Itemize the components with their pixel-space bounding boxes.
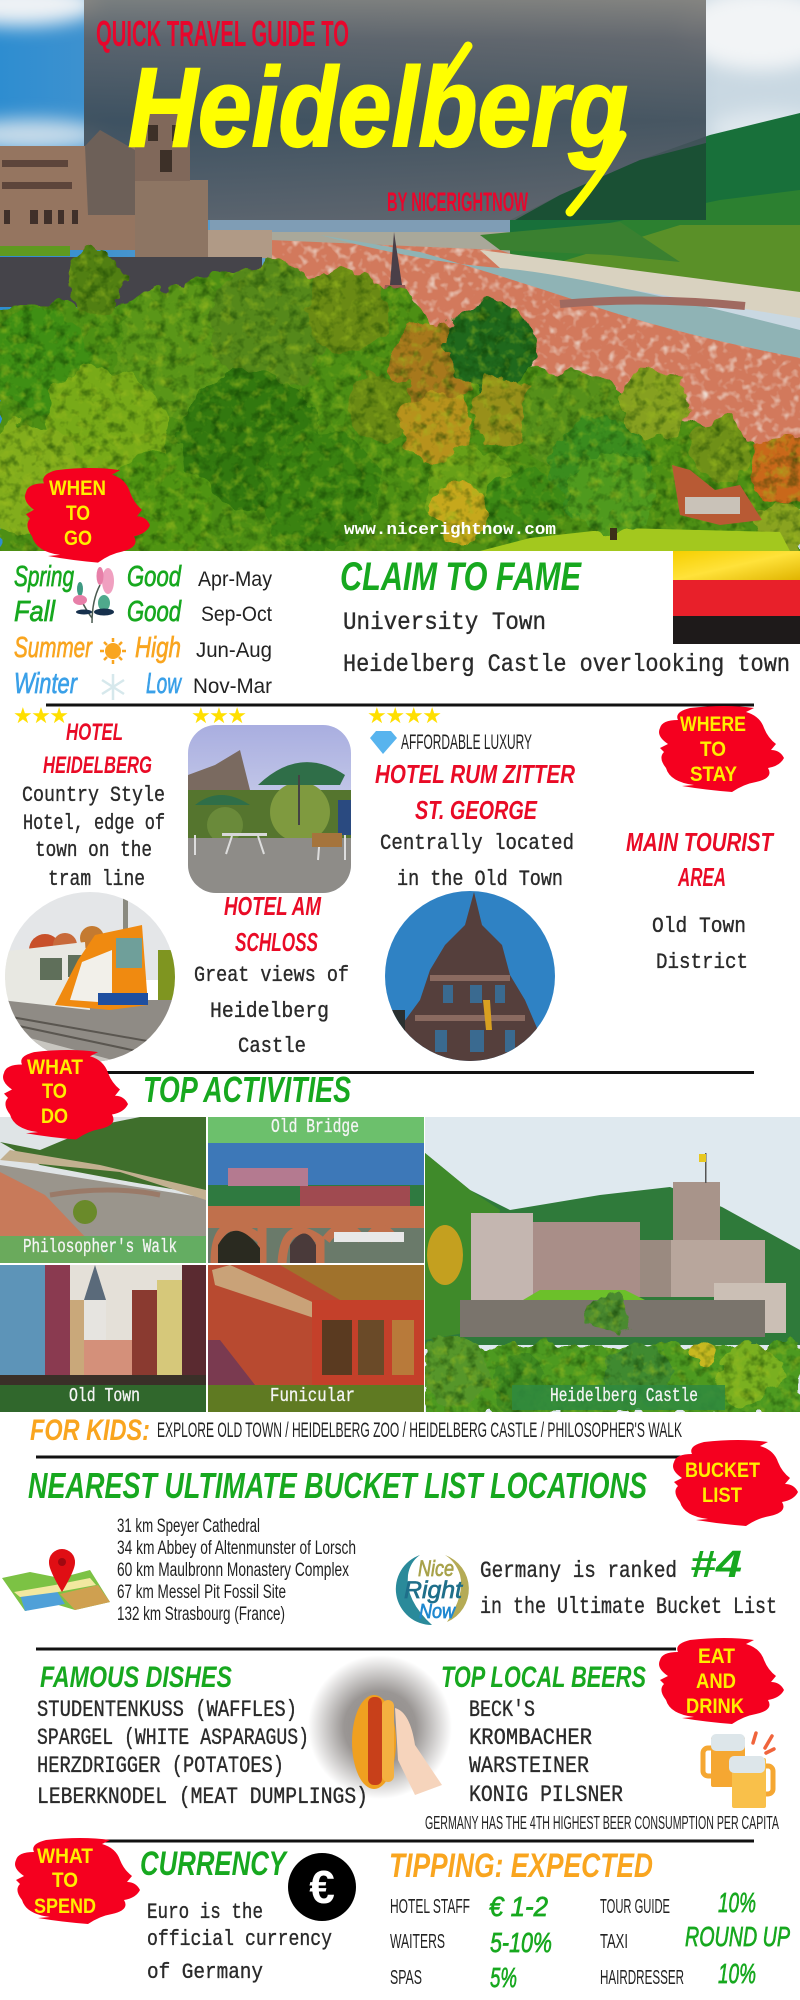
description: Country Style (22, 783, 165, 808)
text (147, 1900, 332, 1985)
germany ranking: Germany is ranked (480, 1558, 677, 1584)
website url: www.nicerightnow.com (344, 521, 556, 540)
German flag (673, 551, 800, 644)
badge: when to go (25, 468, 150, 563)
panel: hotel am schloss (188, 704, 351, 1059)
panel: claim to fame (340, 551, 800, 679)
text: of Germany (147, 1960, 263, 1985)
description: in the Old Town (397, 867, 563, 892)
photo: heidelberg castle (420, 1117, 800, 1417)
badge: when to go: TO (66, 502, 90, 525)
list: SPARGEL (WHITE ASPARAGUS) (37, 1725, 309, 1751)
icon: sun (100, 638, 126, 664)
description: Heidelberg (210, 999, 329, 1024)
photo grid (0, 1116, 800, 1417)
summer row: Summer (14, 632, 93, 664)
label: affordable luxury: AFFORDABLE LUXURY (401, 731, 532, 754)
badge: eat and drink: DRINK (686, 1695, 744, 1718)
winter row: Winter (14, 668, 78, 700)
list: KONIG PILSNER (469, 1782, 623, 1808)
photo: old town (0, 1265, 206, 1412)
list (469, 1697, 623, 1808)
icon: euro coin: € (309, 1861, 335, 1913)
photo: hotel terrace (188, 725, 351, 893)
photo: philosopher's walk: Philosopher's Walk (23, 1236, 177, 1258)
heading (626, 827, 775, 892)
panel: where to stay (626, 706, 784, 975)
text (652, 914, 748, 975)
logo: nice right now: Now (419, 1601, 456, 1623)
description: tram line (48, 867, 145, 892)
description: Castle (238, 1034, 306, 1059)
heading: FAMOUS DISHES (40, 1661, 232, 1694)
icon: flower (73, 567, 114, 623)
tipping values: € 1-2 (489, 1891, 548, 1922)
bucket list distances: 31 km Speyer Cathedral (117, 1516, 260, 1537)
list: LEBERKNODEL (MEAT DUMPLINGS) (37, 1784, 368, 1810)
tipping labels: WAITERS (390, 1931, 445, 1953)
icon: diamond (370, 731, 397, 754)
winter row: Low (146, 668, 182, 700)
fall row: Fall (14, 596, 56, 628)
tipping labels: HOTEL STAFF (390, 1896, 470, 1918)
panel: famous dishes (37, 1655, 452, 1810)
tipping values: 10% (718, 1958, 756, 1989)
tipping values: 10% (718, 1887, 756, 1918)
winter row: Nov-Mar (193, 675, 272, 698)
bucket list distances: 132 km Strasbourg (France) (117, 1604, 285, 1625)
spring row: Apr-May (198, 568, 272, 591)
list: STUDENTENKUSS (WAFFLES) (37, 1697, 297, 1723)
spring row: Spring (14, 561, 74, 593)
foliage (0, 250, 800, 577)
photo: old town: Old Town (69, 1385, 140, 1407)
tipping values: 5-10% (490, 1927, 552, 1958)
description: town on the (35, 838, 152, 863)
list: WARSTEINER (469, 1753, 589, 1779)
stars: ★★★ (13, 704, 69, 729)
title line: quick travel guide: QUICK TRAVEL GUIDE TO (96, 13, 349, 54)
winter row (14, 668, 272, 700)
logo: nice right now: Right (404, 1577, 463, 1604)
byline: BY NICERIGHTNOW (387, 187, 528, 217)
heading: CLAIM TO FAME (340, 555, 582, 599)
for kids line (30, 1414, 682, 1447)
bucket list distances: 67 km Messel Pit Fossil Site (117, 1582, 286, 1603)
summer row: High (135, 632, 181, 664)
photo: philosopher's walk (0, 1117, 206, 1263)
logo: nice right now (396, 1555, 469, 1625)
name: HOTEL (66, 719, 123, 746)
stars: ★★★ (191, 704, 247, 729)
tipping values: 5% (490, 1962, 517, 1993)
spring row: Good (127, 561, 182, 593)
badge: when to go: GO (64, 527, 92, 550)
photo: funicular (208, 1265, 424, 1412)
badge: when to go: WHEN (49, 477, 106, 500)
badge: bucket list: BUCKET (685, 1459, 760, 1482)
badge: eat and drink (659, 1638, 784, 1724)
bucket list distances (117, 1516, 356, 1625)
badge: bucket list (673, 1440, 798, 1526)
tipping labels: SPAS (390, 1967, 422, 1989)
name: HOTEL RUM ZITTER (375, 759, 575, 789)
panel: currency (140, 1845, 356, 1985)
badge: what to spend: SPEND (34, 1895, 96, 1918)
badge: STAY (690, 763, 737, 786)
badge: what to spend: WHAT (37, 1845, 93, 1868)
icon: euro coin (288, 1853, 356, 1921)
title: Heidelberg (128, 45, 628, 212)
badge: eat and drink: EAT (698, 1645, 735, 1668)
castle ruin (0, 109, 272, 307)
badge (659, 706, 784, 792)
badge: bucket list: LIST (702, 1484, 742, 1507)
bucket list distances: 34 km Abbey of Altenmunster of Lorsch (117, 1538, 356, 1559)
bucket list distances: 60 km Maulbronn Monastery Complex (117, 1560, 349, 1581)
text: University Town (343, 608, 546, 637)
panel: seasons (14, 561, 272, 700)
description: Hotel, edge of (23, 811, 165, 836)
tipping labels (390, 1896, 684, 1989)
panel: hotel rum zitter (367, 704, 575, 1065)
name (375, 759, 575, 825)
tipping labels: TAXI (600, 1931, 628, 1953)
photo: hot dog (308, 1655, 452, 1799)
summer row (14, 632, 272, 664)
heading: TIPPING: EXPECTED (389, 1847, 653, 1885)
text: District (656, 950, 748, 975)
title: Heidelberg: Heidelberg (128, 45, 628, 170)
list: KROMBACHER (469, 1725, 592, 1751)
heading: CURRENCY (140, 1845, 289, 1883)
badge: WHERE (680, 713, 746, 736)
icon: map with pin (2, 1549, 110, 1611)
photo: funicular: Funicular (270, 1385, 355, 1407)
germany ranking (480, 1544, 777, 1620)
icon: beer mugs (703, 1733, 774, 1808)
fall row: Sep-Oct (201, 603, 272, 626)
photo: old bridge: Old Bridge (271, 1116, 359, 1138)
badge: eat and drink: AND (696, 1670, 736, 1693)
hero photo: Heidelberg panorama (0, 0, 800, 577)
panel: hotel heidelberg (0, 704, 180, 1070)
stars: ★★★★ (367, 704, 442, 729)
panel: top local beers (425, 1661, 779, 1833)
description: Centrally located (380, 831, 574, 856)
list: BECK'S (469, 1697, 535, 1723)
heading: top activities: TOP ACTIVITIES (143, 1069, 351, 1110)
badge: what to do: WHAT (27, 1056, 83, 1079)
badge: what to spend: TO (52, 1869, 78, 1892)
photo: building (380, 890, 560, 1065)
name: ST. GEORGE (415, 795, 538, 825)
text: Euro is the (147, 1900, 263, 1925)
fall row (14, 596, 272, 628)
spring row (14, 561, 272, 593)
tipping values (489, 1887, 790, 1993)
badge: what to do (3, 1050, 128, 1139)
tipping labels: TOUR GUIDE (600, 1896, 670, 1918)
fall row: Good (127, 596, 182, 628)
photo: heidelberg castle: Heidelberg Castle (550, 1385, 698, 1407)
panel: tipping (389, 1847, 790, 1993)
badge: what to do: DO (41, 1105, 68, 1128)
heading: AREA (677, 862, 726, 892)
description (380, 831, 574, 892)
logo: nice right now: Nice (418, 1556, 454, 1581)
badge: TO (700, 738, 726, 761)
summer row: Jun-Aug (196, 639, 272, 662)
tipping labels: HAIRDRESSER (600, 1967, 684, 1989)
number: #4: #4 (690, 1544, 742, 1586)
description: Great views of (194, 963, 349, 988)
badge: what to do: TO (42, 1080, 67, 1103)
name: HOTEL AM (224, 891, 322, 921)
icon: snowflake (102, 674, 124, 700)
text: official currency (147, 1927, 332, 1952)
description (22, 783, 165, 892)
list: HERZDRIGGER (POTATOES) (37, 1753, 284, 1779)
photo: old bridge (208, 1116, 424, 1263)
description (194, 963, 349, 1059)
heading: TOP LOCAL BEERS (441, 1661, 646, 1694)
panel: hotel am schloss: SCHLOSS (235, 927, 318, 957)
list (37, 1697, 368, 1810)
panel: hotel heidelberg: HEIDELBERG (43, 752, 152, 779)
title block (96, 13, 628, 217)
badge: what to spend (15, 1838, 140, 1924)
text: Old Town (652, 914, 746, 939)
photo: tram (5, 892, 175, 1062)
for kids line: FOR KIDS: (30, 1414, 150, 1447)
